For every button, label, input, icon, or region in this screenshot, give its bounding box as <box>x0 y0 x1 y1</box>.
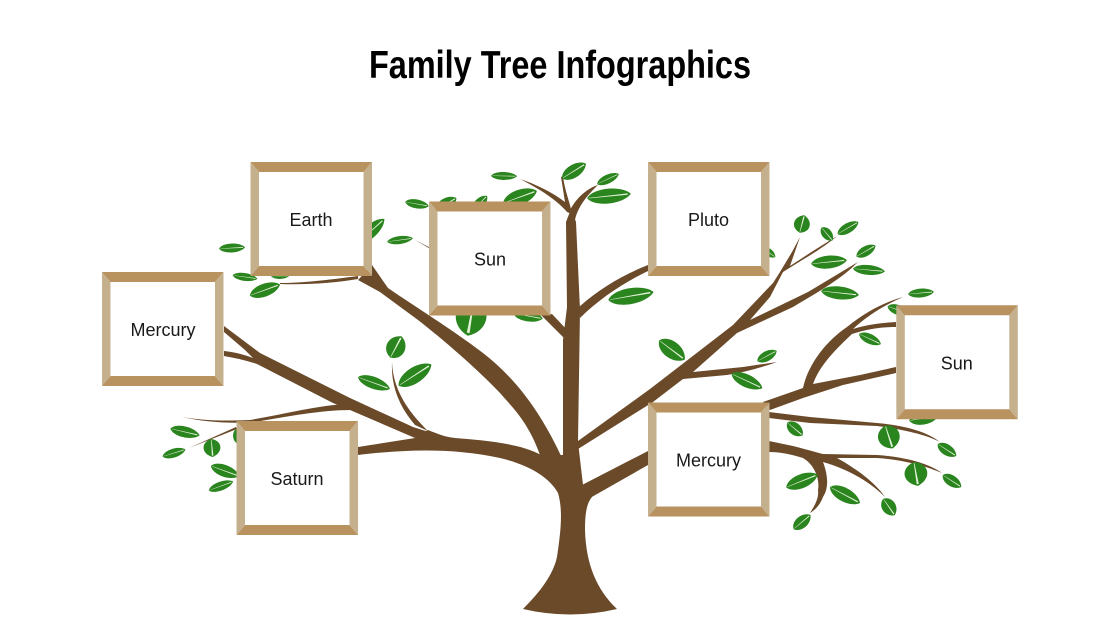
frame: Mercury lower: Mercury <box>676 450 741 470</box>
small branch behind Sun <box>541 314 568 342</box>
twig: behind Saturn <box>189 427 237 448</box>
frame: Saturn <box>236 421 358 535</box>
limb to left Mercury <box>224 326 432 438</box>
frame: Pluto: Pluto <box>688 210 729 230</box>
branch to Pluto <box>579 265 648 318</box>
leaves: upper right cluster <box>792 213 934 349</box>
top fork left twig <box>520 176 572 214</box>
frame: Mercury lower <box>648 402 770 516</box>
leaves: upper left cluster <box>219 172 544 338</box>
frame: Sun centre <box>429 202 550 316</box>
limb to right Sun <box>763 297 903 410</box>
frame: Saturn: Saturn <box>270 469 324 489</box>
top fork right twig <box>570 185 598 220</box>
leaves: centre sprout <box>356 332 436 394</box>
twig: long left sapling <box>182 404 352 423</box>
lower right limb and twigs <box>769 441 942 513</box>
frame: Sun centre: Sun <box>474 250 506 270</box>
branch to lower Mercury <box>582 451 648 498</box>
right main limb <box>578 236 858 449</box>
frame: Sun right: Sun <box>941 353 973 373</box>
leaves: lower left cluster <box>161 423 243 495</box>
leaves: lower right cluster <box>784 409 964 534</box>
frame: Sun right <box>896 305 1018 419</box>
frame: Mercury left: Mercury <box>130 320 196 340</box>
twig to right, upper <box>769 412 940 442</box>
tree: trunk and branches <box>182 176 942 614</box>
twig: left of Sun <box>415 240 430 248</box>
twig: under Earth <box>280 276 358 284</box>
title: Family Tree Infographics <box>369 44 751 87</box>
leaves: centre right cluster <box>654 334 779 394</box>
twig: upward sprout <box>392 362 428 431</box>
leaves: top centre cluster <box>559 158 778 308</box>
frame: Mercury left <box>102 272 224 386</box>
trunk with left limb to Saturn <box>358 209 617 614</box>
limb to Earth <box>358 265 563 460</box>
frame: Earth: Earth <box>289 210 333 230</box>
frame: Earth <box>250 162 372 276</box>
frame: Pluto <box>648 162 770 276</box>
